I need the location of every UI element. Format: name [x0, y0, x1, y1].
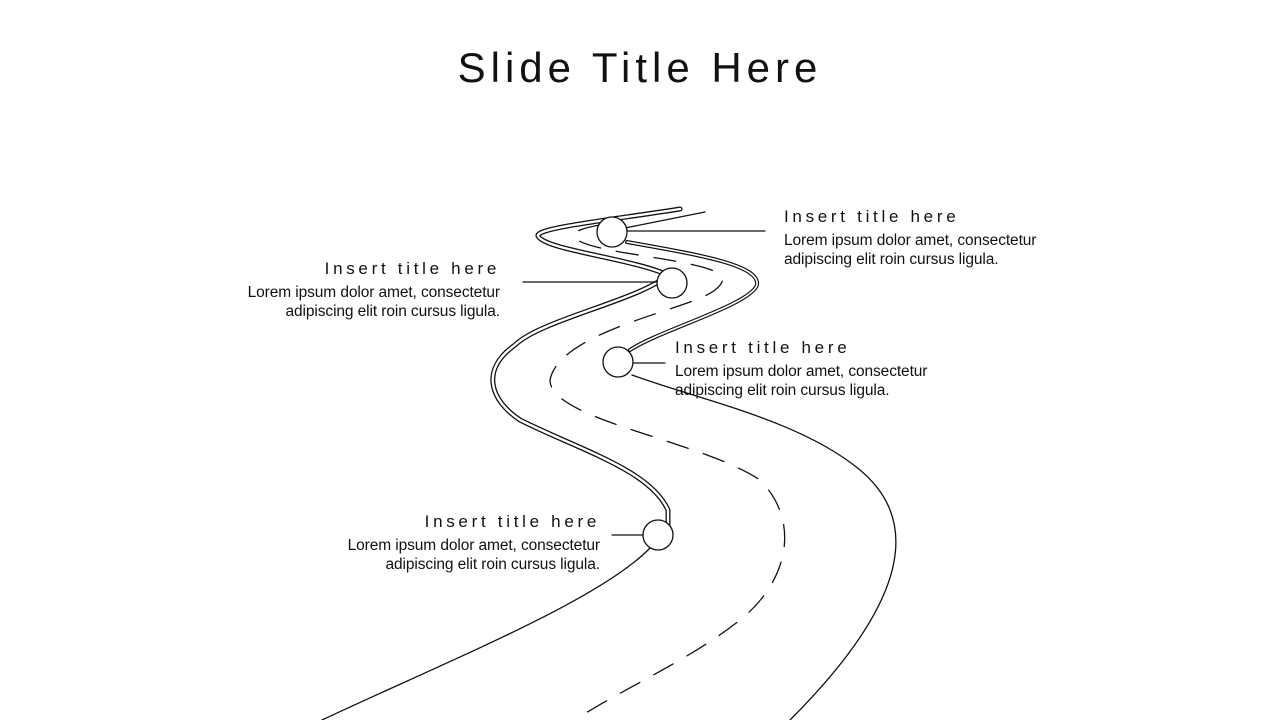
road edge B	[625, 212, 705, 228]
text block 2	[248, 259, 500, 320]
text block 3: Lorem ipsum dolor amet, consectetur	[675, 363, 927, 380]
title: Slide Title Here	[458, 44, 822, 91]
text block 4: Insert title here	[425, 512, 600, 531]
text block 3	[675, 338, 928, 399]
text block 3: adipiscing elit roin cursus ligula.	[675, 382, 889, 399]
text block 1: Insert title here	[784, 207, 959, 226]
text block 1: Lorem ipsum dolor amet, consectetur	[784, 232, 1036, 249]
text block 1: adipiscing elit roin cursus ligula.	[784, 251, 998, 268]
text block 2: Lorem ipsum dolor amet, consectetur	[248, 284, 500, 301]
text block 2: adipiscing elit roin cursus ligula.	[286, 303, 500, 320]
text block 3: Insert title here	[675, 338, 850, 357]
connectors	[523, 231, 765, 535]
text block 4	[348, 512, 600, 573]
milestone circles	[597, 217, 687, 550]
text block 2: Insert title here	[325, 259, 500, 278]
center dashes	[550, 225, 785, 720]
road edge A double line	[493, 209, 680, 525]
text block 4: adipiscing elit roin cursus ligula.	[386, 556, 600, 573]
text block 4: Lorem ipsum dolor amet, consectetur	[348, 537, 600, 554]
text block 1	[784, 207, 1036, 268]
